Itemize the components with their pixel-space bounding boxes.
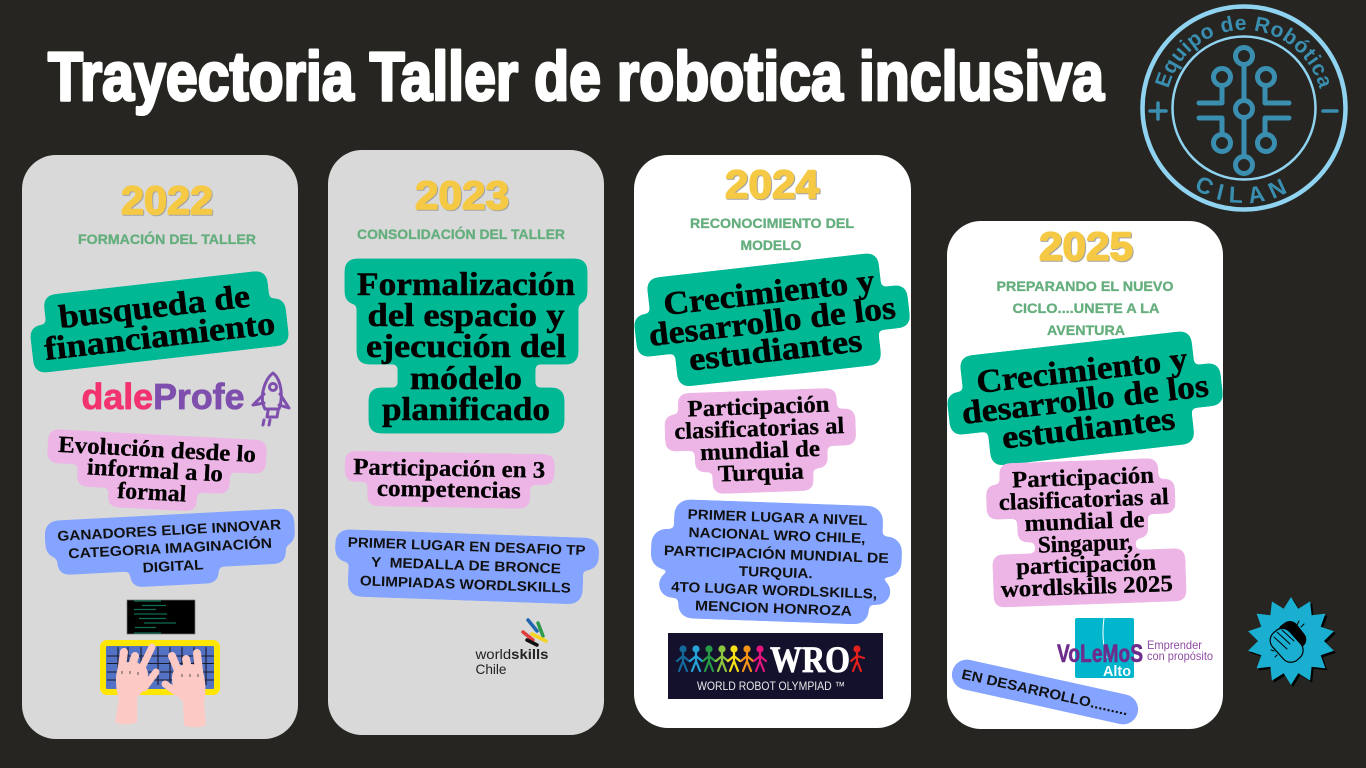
callout: Evolución desde lo informal a lo formal: formal bbox=[117, 478, 187, 508]
logo: daleProfe: daleProfe bbox=[82, 376, 244, 417]
subtitle 2025 bbox=[996, 278, 1174, 338]
panel: 2025 bbox=[943, 221, 1228, 729]
callout: Primer lugar en Desafio TP: PRIMER LUGAR EN DESAFIO TP bbox=[347, 534, 586, 558]
callout: Participación en 3 competencias: competencias bbox=[377, 476, 521, 504]
subtitle 2024: MODELO bbox=[740, 237, 802, 253]
callout: Participación clasificatorias Turquia bbox=[664, 388, 857, 495]
callout: Primer lugar WRO Chile: TURQUIA. bbox=[738, 563, 813, 581]
callout: Primer lugar en Desafio TP bbox=[334, 529, 599, 605]
callout: Ganadores Elige Innovar: GANADORES ELIGE INNOVAR bbox=[57, 516, 281, 544]
heading: Crecimiento y desarrollo: desarrollo de los bbox=[960, 368, 1211, 432]
icon: code screen bbox=[127, 600, 195, 634]
callout: Evolución desde lo informal a lo formal: informal a lo bbox=[86, 454, 224, 487]
heading: Crecimiento y desarrollo: estudiantes bbox=[1000, 401, 1177, 457]
icon: keyboard and hands bbox=[103, 643, 217, 727]
logo: Volemos Alto: Emprender bbox=[1147, 638, 1202, 652]
callout: Primer lugar WRO Chile: PARTICIPACIÓN MUNDIAL DE bbox=[664, 541, 889, 566]
callout: Primer lugar en Desafio TP: OLIMPIADAS WORDLSKILLS bbox=[360, 572, 571, 596]
logo: Volemos Alto: con propósito bbox=[1147, 649, 1213, 663]
panel: 2022 bbox=[22, 155, 298, 739]
callout: Participación clasificatorias Singapur: clasificatorias al bbox=[998, 484, 1170, 516]
subtitle 2024: RECONOCIMIENTO DEL bbox=[690, 215, 854, 231]
callout: Primer lugar en Desafio TP: Y MEDALLA DE BRONCE bbox=[371, 554, 561, 576]
callout: Evolución desde lo informal a lo formal bbox=[45, 429, 267, 515]
callout: Primer lugar WRO Chile: 4TO LUGAR WORDLSKILLS, bbox=[671, 578, 877, 602]
subtitle 2023: CONSOLIDACIÓN DEL TALLER bbox=[357, 225, 565, 242]
callout: Primer lugar WRO Chile: NACIONAL WRO CHILE, bbox=[688, 524, 866, 546]
logo: worldskills Chile bbox=[474, 620, 549, 677]
callout: Ganadores Elige Innovar: DIGITAL bbox=[142, 556, 204, 575]
heading: Crecimiento y desarrollo: estudiantes bbox=[687, 323, 864, 379]
subtitle 2025: CICLO....UNETE A LA bbox=[1012, 300, 1160, 316]
logo: WRO: WRO bbox=[770, 640, 850, 681]
callout: Participación clasificatorias Singapur bbox=[985, 458, 1186, 607]
heading: Formalización del espacio: del espacio y bbox=[368, 298, 565, 334]
logo: Equipo de Robótica CILAN: CILAN bbox=[1196, 178, 1286, 204]
logo: Volemos Alto: VoLeMoS bbox=[1057, 640, 1143, 668]
heading: Crecimiento y desarrollo: desarrollo de los bbox=[647, 290, 898, 354]
callout: Primer lugar WRO Chile: PRIMER LUGAR A NIVEL bbox=[687, 506, 868, 528]
callout: Participación clasificatorias Singapur: participación bbox=[1016, 550, 1156, 580]
callout: Participación clasificatorias Turquia: clasificatorias al bbox=[674, 413, 845, 445]
callout: Ganadores Elige Innovar: CATEGORIA IMAGINACIÓN bbox=[68, 534, 272, 561]
logo: Volemos Alto: Alto bbox=[1103, 663, 1131, 680]
subtitle 2025: PREPARANDO EL NUEVO bbox=[996, 278, 1174, 294]
heading: busqueda de financiamiento: financiamiento bbox=[42, 306, 277, 368]
subtitle 2024 bbox=[690, 215, 854, 253]
logo: Equipo de Robótica CILAN bbox=[1140, 4, 1348, 212]
panel: 2023 bbox=[328, 150, 604, 735]
callout: Participación clasificatorias Turquia: Turquia bbox=[717, 458, 804, 487]
heading: Crecimiento y desarrollo: Crecimiento y bbox=[975, 341, 1190, 401]
heading: busqueda de financiamiento bbox=[26, 269, 289, 373]
year 2023: 2023 bbox=[415, 174, 509, 218]
heading: Formalización del espacio bbox=[345, 259, 587, 433]
icon: clapping hands badge bbox=[1248, 597, 1336, 687]
heading: Crecimiento y desarrollo bbox=[630, 250, 914, 391]
heading: Crecimiento y desarrollo: Crecimiento y bbox=[662, 263, 877, 323]
callout: Participación clasificatorias Turquia: Participación bbox=[687, 392, 830, 422]
callout: Primer lugar WRO Chile: MENCION HONROZA bbox=[695, 597, 852, 619]
callout: En desarrollo: EN DESARROLLO......... bbox=[960, 666, 1130, 718]
heading: busqueda de financiamiento: busqueda de bbox=[57, 279, 252, 336]
subtitle 2022: FORMACIÓN DEL TALLER bbox=[78, 230, 256, 247]
callout: Participación en 3 competencias: Participación en 3 bbox=[353, 454, 545, 484]
logo: worldskills Chile: worldskills bbox=[474, 646, 549, 662]
logo: worldskills Chile: Chile bbox=[476, 661, 507, 677]
logo: WRO bbox=[668, 633, 883, 699]
subtitle 2025: AVENTURA bbox=[1047, 322, 1125, 338]
panel: 2024 bbox=[630, 155, 914, 728]
heading: Formalización del espacio: ejecución del bbox=[366, 329, 566, 365]
year 2024: 2024 bbox=[725, 163, 820, 207]
callout: Participación clasificatorias Singapur: wordlskills 2025 bbox=[1000, 571, 1173, 603]
logo: Equipo de Robótica CILAN: Equipo de Robótica bbox=[1155, 16, 1329, 89]
heading: Crecimiento y desarrollo bbox=[943, 328, 1228, 470]
title: Trayectoria Taller de robotica inclusiva bbox=[48, 38, 1105, 115]
heading: Formalización del espacio: Formalización bbox=[357, 267, 575, 303]
callout: Participación clasificatorias Singapur: Singapur, bbox=[1037, 529, 1133, 559]
year 2022: 2022 bbox=[121, 179, 213, 223]
logo: daleProfe bbox=[82, 373, 289, 425]
callout: Participación clasificatorias Turquia: mundial de bbox=[700, 436, 820, 466]
heading: Formalización del espacio: módelo bbox=[410, 361, 522, 397]
logo: WRO: WORLD ROBOT OLYMPIAD ™ bbox=[697, 679, 845, 693]
callout: Primer lugar WRO Chile bbox=[649, 499, 903, 625]
year 2025: 2025 bbox=[1039, 225, 1133, 269]
callout: Ganadores Elige Innovar bbox=[45, 509, 297, 591]
callout: Participación clasificatorias Singapur: mundial de bbox=[1024, 507, 1145, 537]
heading: Formalización del espacio: planificado bbox=[382, 392, 550, 428]
callout: Participación en 3 competencias bbox=[345, 451, 554, 509]
callout: Evolución desde lo informal a lo formal: Evolución desde lo bbox=[58, 432, 257, 468]
callout: Participación clasificatorias Singapur: Participación bbox=[1012, 463, 1154, 494]
logo: Volemos Alto bbox=[1057, 618, 1213, 680]
callout: En desarrollo bbox=[949, 657, 1141, 727]
